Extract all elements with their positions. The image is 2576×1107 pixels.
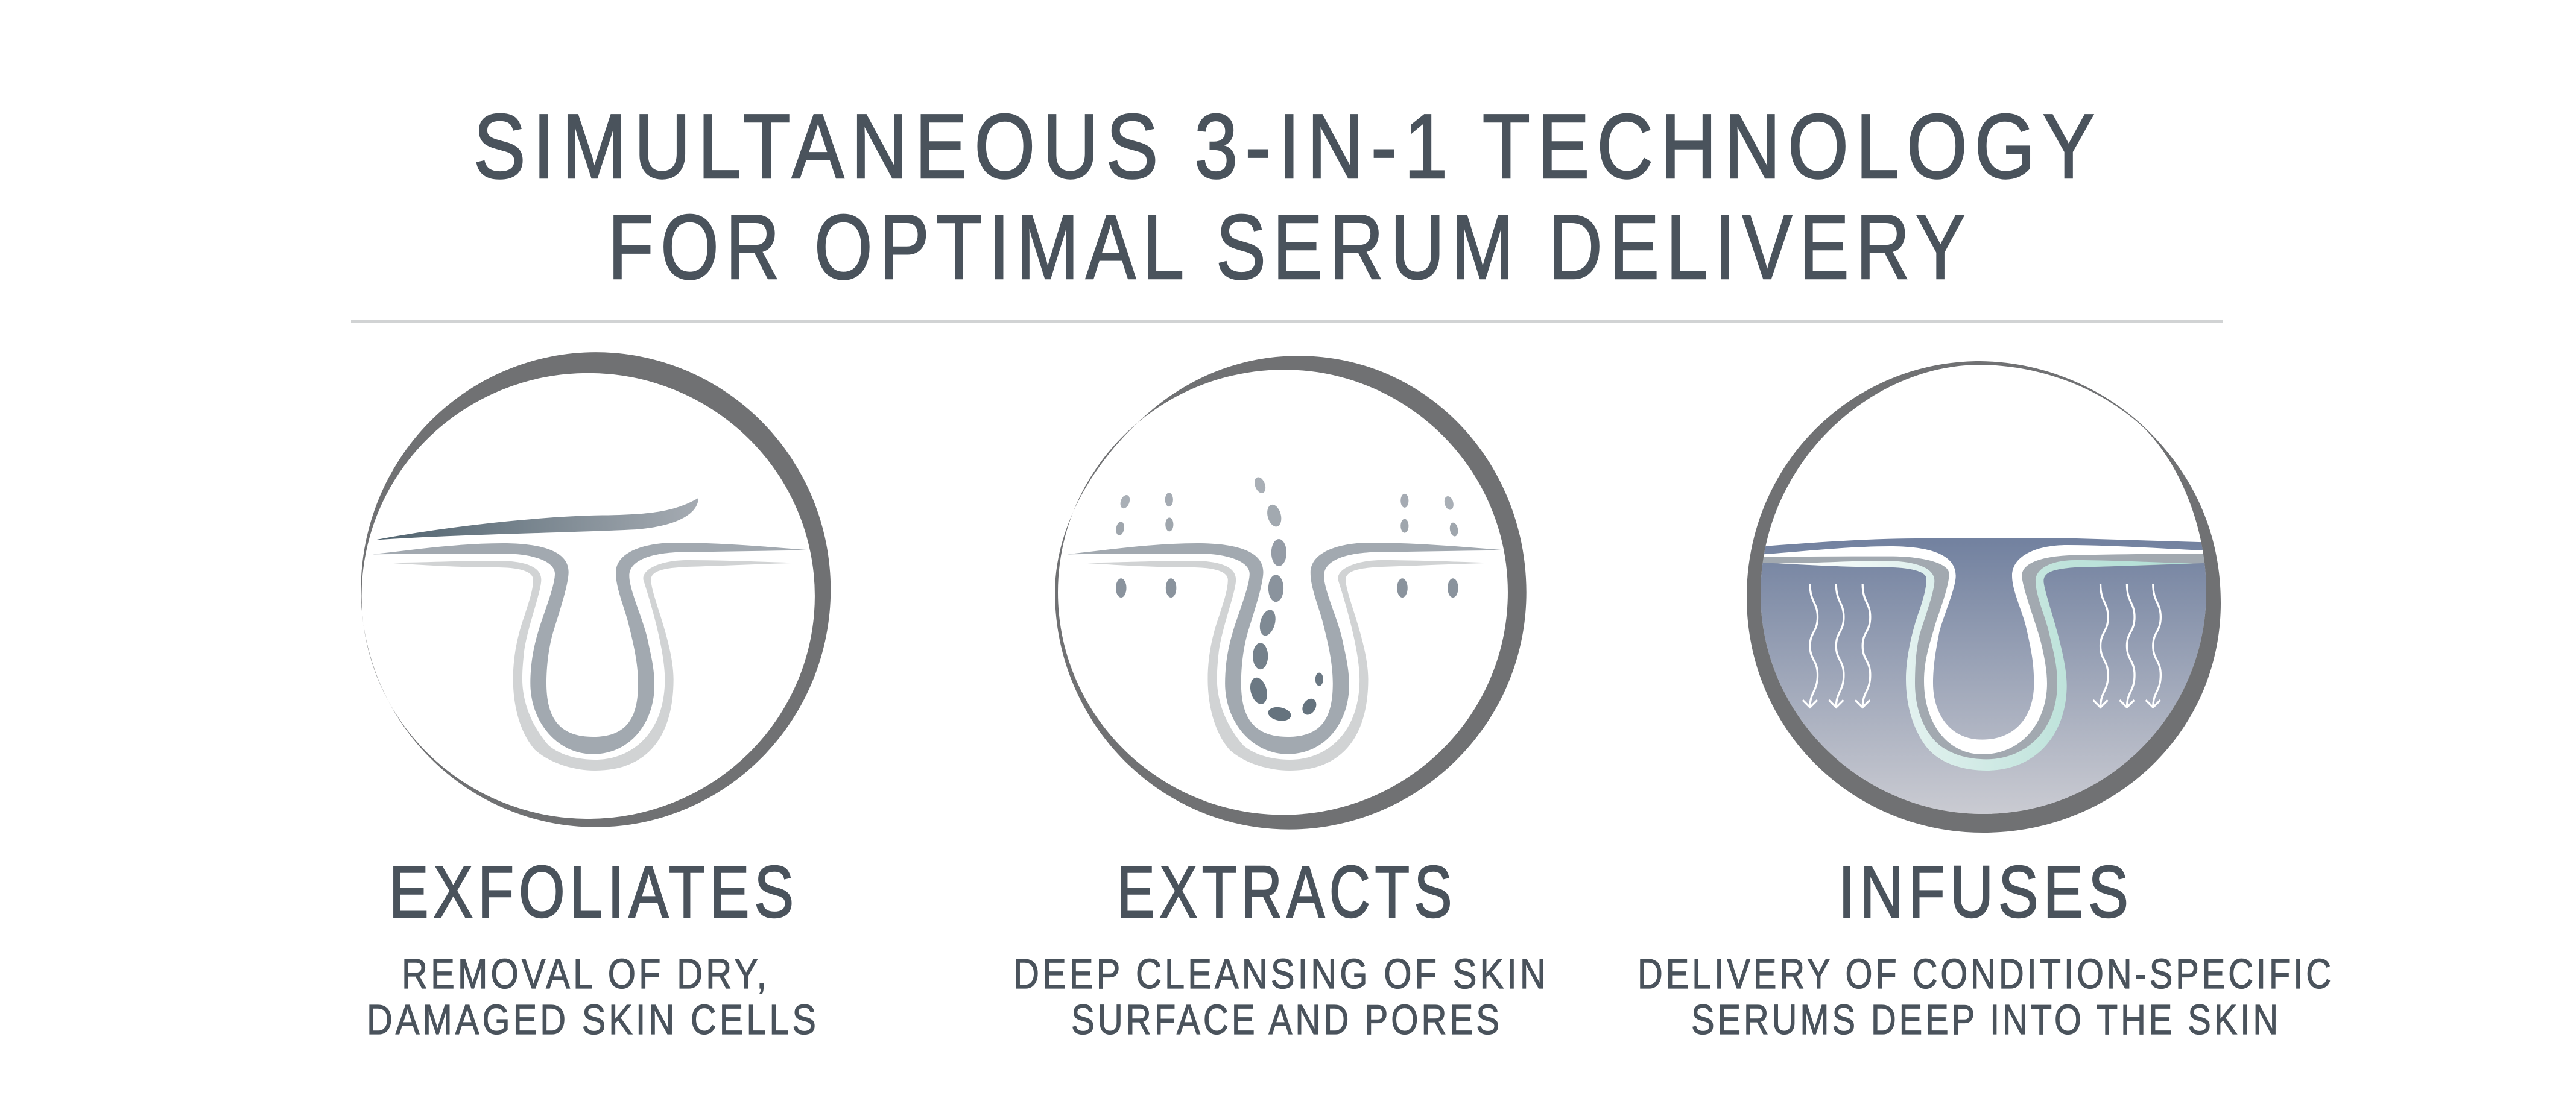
dead skin flake [375, 498, 698, 540]
description: extracts: SURFACE AND PORES [1071, 996, 1502, 1043]
serum arrows right [2093, 584, 2160, 707]
follicle grey band [1757, 550, 2209, 771]
follicle mint band [1778, 560, 2193, 771]
panel: extracts icon [1055, 356, 1527, 830]
description: extracts [1013, 950, 1549, 1043]
extracted impurity particles [1115, 476, 1459, 722]
follicle outer band [1082, 560, 1494, 771]
panel: infuses icon [1747, 361, 2221, 844]
title [473, 95, 2102, 298]
follicle white band [1757, 545, 2209, 754]
title: FOR OPTIMAL SERUM DELIVERY [608, 196, 1972, 298]
icon ring [361, 352, 831, 827]
description: infuses [1638, 950, 2334, 1043]
description: exfoliates [367, 950, 819, 1043]
icon ring [1747, 361, 2221, 833]
title: SIMULTANEOUS 3-IN-1 TECHNOLOGY [473, 95, 2102, 198]
follicle outer band [387, 560, 799, 771]
description: exfoliates: REMOVAL OF DRY, [402, 950, 770, 997]
serum gradient fill [1761, 538, 2206, 814]
serum arrows left [1803, 584, 1870, 707]
heading: exfoliates: EXFOLIATES [389, 851, 799, 933]
panel: exfoliates icon [361, 352, 831, 827]
icon ring [1055, 356, 1527, 830]
description: extracts: DEEP CLEANSING OF SKIN [1013, 950, 1549, 997]
description: infuses: DELIVERY OF CONDITION-SPECIFIC [1638, 950, 2334, 997]
heading: extracts: EXTRACTS [1117, 851, 1457, 933]
heading: infuses: INFUSES [1838, 851, 2133, 933]
follicle inner band [1067, 543, 1505, 754]
follicle inner band [373, 543, 811, 754]
divider rule [351, 320, 2223, 323]
description: exfoliates: DAMAGED SKIN CELLS [367, 996, 819, 1043]
description: infuses: SERUMS DEEP INTO THE SKIN [1691, 996, 2281, 1043]
